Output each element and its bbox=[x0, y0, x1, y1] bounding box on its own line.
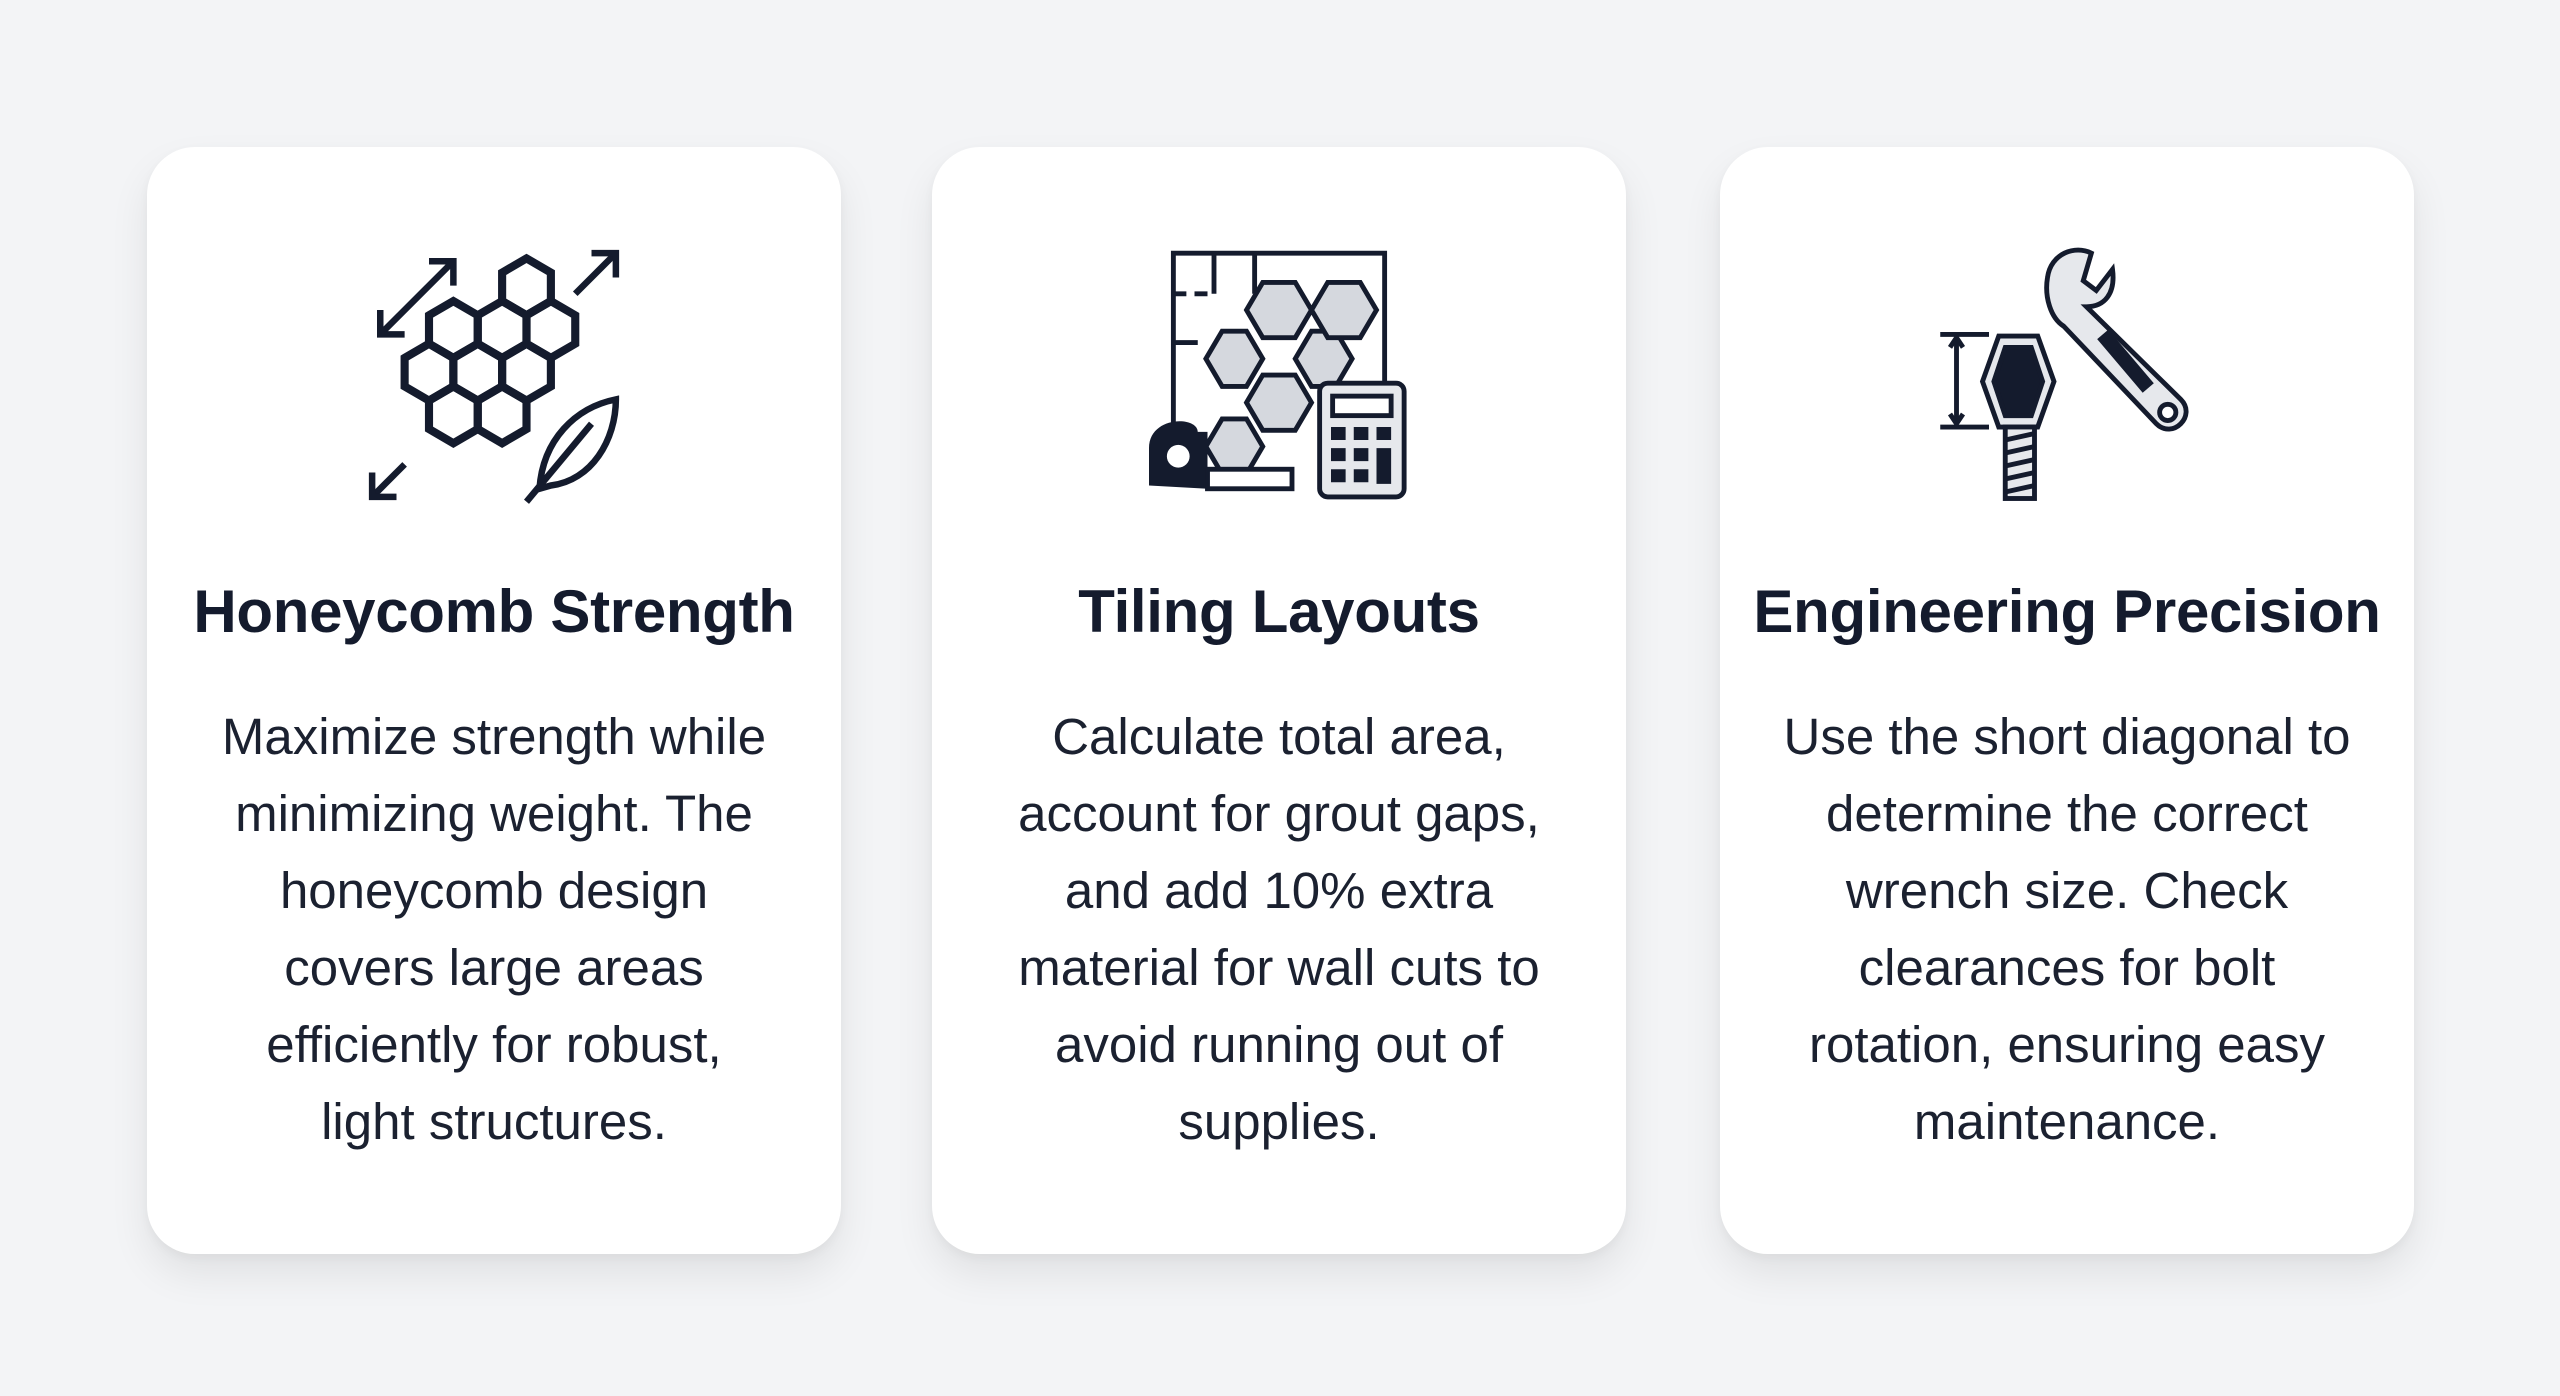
text block: Calculate total area, account for grout gaps, and add 10% extra material for wall cuts to avoid running out of supplies. bbox=[1018, 708, 1540, 1150]
icon: floor plan, tape, calculator bbox=[1149, 250, 1407, 500]
heading: Tiling Layouts bbox=[1078, 578, 1480, 645]
panel: honeycomb strength bbox=[147, 147, 841, 1254]
heading: Honeycomb Strength bbox=[193, 578, 795, 645]
heading: Engineering Precision bbox=[1753, 578, 2381, 645]
icon: bolt, wrench, dimension bbox=[1940, 248, 2189, 501]
icon: honeycomb with arrows and feather bbox=[368, 250, 620, 504]
text block: Use the short diagonal to determine the correct wrench size. Check clearances for bolt rotation, ensuring easy maintenance. bbox=[1783, 708, 2351, 1150]
panel: tiling layouts bbox=[932, 147, 1626, 1254]
text block: Maximize strength while minimizing weight. The honeycomb design covers large areas efficiently for robust, light structures. bbox=[222, 708, 766, 1150]
panel: engineering precision bbox=[1720, 147, 2414, 1254]
